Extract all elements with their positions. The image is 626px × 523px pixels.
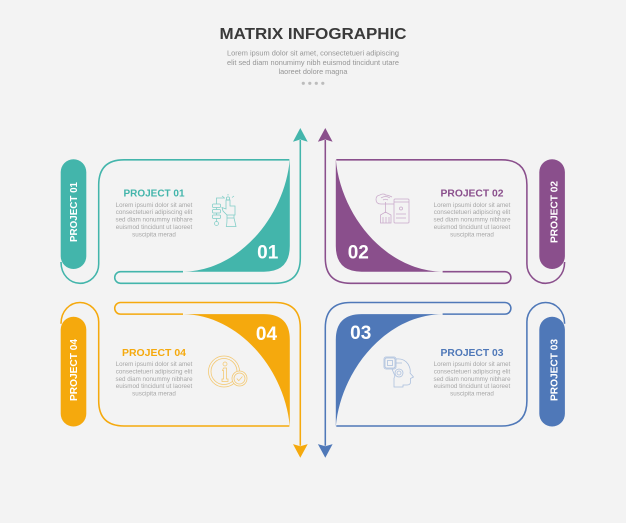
panel: project 04 [61,302,308,458]
body 04: suscipita merad [132,391,176,398]
icon: cyber head [384,357,414,387]
body 03: euismod tincidunt ut laoreet [434,383,510,390]
body 01: Lorem ipsumi dolor sit amet [116,202,193,209]
heading 01: PROJECT 01 [124,189,185,200]
pill label 04: PROJECT 04 [69,339,80,401]
pill label 02: PROJECT 02 [550,181,560,243]
body 01: euismod tincidunt ut laoreet [116,224,192,231]
body 03: Lorem ipsumi dolor sit amet [434,361,511,368]
subtitle [227,48,399,76]
body 03: suscipita merad [450,391,494,398]
subtitle: laoreet dolore magna [278,67,348,76]
header [220,26,406,85]
pill label 03: PROJECT 03 [550,339,560,401]
quadrant shape 03 [318,302,565,458]
number 02: 02 [348,242,369,264]
icon: robot hand flowchart [212,194,236,226]
body 04: consectetueri adipiscing elit [116,368,192,375]
body 02 [433,202,511,238]
body 03: consectetueri adipiscing elit [434,368,510,375]
body 02: suscipita merad [450,232,494,238]
number 01: 01 [257,242,279,264]
body 01: sed diam nonummy nibhare [115,217,193,224]
heading 04: PROJECT 04 [122,348,186,359]
quadrant shape 04 [61,302,308,458]
body 04 [115,361,193,398]
quadrant shape 02 [318,128,565,283]
body 03 [433,361,511,398]
panel: project 03 [318,302,565,458]
body 04: Lorem ipsumi dolor sit amet [116,361,193,368]
pill label 01: PROJECT 01 [69,182,80,242]
subtitle: elit sed diam nonumimy nibh euismod tincidunt utare [227,58,399,67]
icon: cloud and mobile [376,194,409,223]
body 01 [115,202,193,238]
icon: info with check [208,356,247,387]
body 02: Lorem ipsumi dolor sit amet [434,202,511,209]
body 01: suscipita merad [132,232,176,238]
number 03: 03 [350,323,371,344]
body 03: sed diam nonummy nibhare [433,376,511,383]
panel: project 02 [318,128,565,283]
body 01: consectetueri adipiscing elit [116,209,192,216]
subtitle: Lorem ipsum dolor sit amet, consectetueri adipiscing [227,48,399,58]
number 04: 04 [256,324,277,345]
body 02: sed diam nonummy nibhare [433,217,511,224]
body 04: sed diam nonummy nibhare [115,376,193,383]
panel: project 01 [61,128,308,283]
body 02: consectetueri adipiscing elit [434,209,510,216]
quadrant shape 01 [61,128,308,283]
pagination dots [302,82,324,85]
heading 03: PROJECT 03 [440,348,504,359]
title: MATRIX INFOGRAPHIC [220,26,406,43]
body 04: euismod tincidunt ut laoreet [116,383,192,390]
heading 02: PROJECT 02 [440,189,504,200]
body 02: euismod tincidunt ut laoreet [434,224,510,231]
